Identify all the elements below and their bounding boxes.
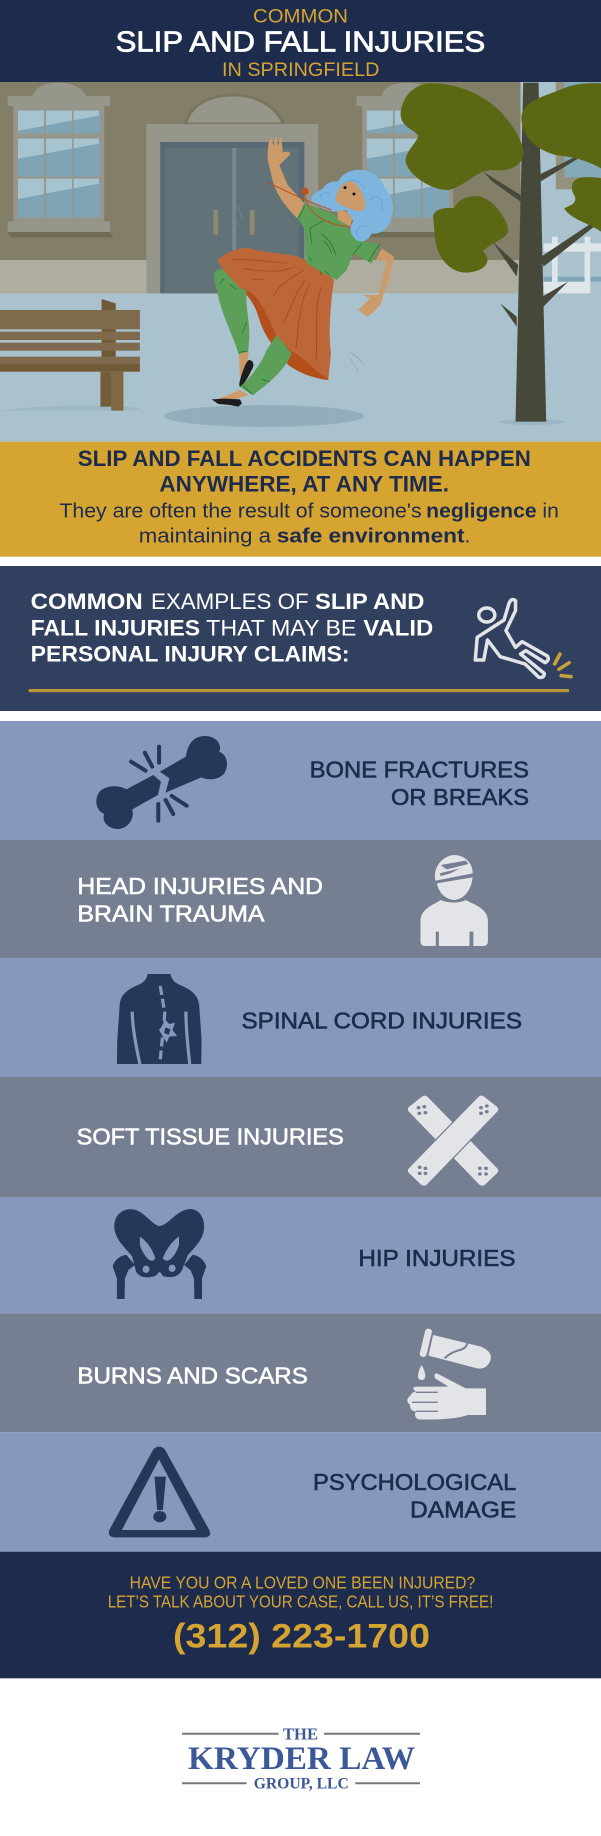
call to action footer	[0, 1552, 601, 1678]
icon: person falling	[475, 599, 571, 677]
law firm logo: THE	[283, 1724, 318, 1744]
intro heading: EXAMPLES OF	[151, 589, 309, 614]
building and street scene	[0, 82, 601, 442]
injury row: soft tissue	[0, 1077, 601, 1197]
woman shadow	[164, 405, 364, 427]
call to action text: HAVE YOU OR A LOVED ONE BEEN INJURED?	[130, 1573, 476, 1593]
bench	[0, 405, 140, 411]
law firm logo	[182, 1724, 420, 1793]
intro heading: SLIP AND	[315, 589, 424, 614]
intro heading: THAT MAY BE	[206, 616, 356, 641]
statement body	[59, 499, 559, 547]
label: PSYCHOLOGICAL	[313, 1469, 517, 1495]
label: SOFT TISSUE INJURIES	[77, 1123, 344, 1149]
statement body: They are often the result of someone's	[59, 499, 422, 522]
intro heading: PERSONAL INJURY CLAIMS:	[31, 642, 350, 667]
tree trunk and branches	[483, 83, 594, 422]
statement body: .	[465, 524, 470, 547]
intro heading: VALID	[363, 616, 433, 641]
injury row: psychological damage	[0, 1432, 601, 1552]
label	[77, 873, 323, 927]
gold statement band	[0, 442, 601, 557]
label: BRAIN TRAUMA	[77, 901, 265, 927]
phone number: (312) 223-1700	[173, 1618, 430, 1656]
woman falling	[212, 138, 394, 407]
title: SLIP AND FALL INJURIES	[116, 27, 485, 59]
gold statement band: ANYWHERE, AT ANY TIME.	[159, 472, 449, 497]
intro heading	[31, 589, 433, 667]
navy intro panel	[0, 566, 601, 711]
header banner	[0, 0, 601, 82]
door	[160, 142, 304, 293]
label	[310, 757, 529, 810]
door surround	[185, 95, 284, 124]
label: OR BREAKS	[391, 784, 529, 810]
icon: broken bone	[96, 736, 227, 829]
statement body: negligence	[426, 499, 537, 522]
call to action text	[108, 1573, 493, 1612]
law firm logo: GROUP, LLC	[254, 1776, 349, 1793]
label: HIP INJURIES	[358, 1245, 516, 1271]
label: BURNS AND SCARS	[77, 1363, 308, 1389]
tree shadow	[499, 419, 564, 425]
header location: IN SPRINGFIELD	[222, 59, 380, 81]
icon: spine and back	[117, 974, 202, 1064]
label: HEAD INJURIES AND	[77, 873, 323, 899]
statement body: in	[542, 499, 559, 522]
injury row: spinal cord	[0, 958, 601, 1077]
icon: chemical tube over hand	[407, 1332, 491, 1420]
label: BONE FRACTURES	[310, 757, 529, 783]
statement heading: SLIP AND FALL ACCIDENTS CAN HAPPEN	[78, 446, 531, 471]
icon: bandaged head	[420, 855, 488, 946]
statement body: maintaining a	[139, 524, 272, 547]
label: SPINAL CORD INJURIES	[242, 1007, 522, 1033]
left window	[8, 83, 113, 237]
injury row: burns	[0, 1313, 601, 1432]
intro heading: COMMON	[31, 589, 143, 614]
icon: pelvis	[113, 1209, 206, 1299]
injury row: head injuries	[0, 840, 601, 958]
label	[313, 1469, 517, 1523]
label: DAMAGE	[410, 1497, 516, 1523]
statement body: safe environment	[277, 524, 465, 547]
injury row: bone fractures	[0, 721, 601, 840]
divider rule	[29, 689, 569, 692]
icon: crossed bandages	[412, 1099, 494, 1182]
intro heading: FALL INJURIES	[31, 616, 200, 641]
injury row: hip	[0, 1197, 601, 1313]
call to action text: LET’S TALK ABOUT YOUR CASE, CALL US, IT’S FREE!	[108, 1592, 493, 1612]
law firm logo: KRYDER LAW	[188, 1741, 415, 1777]
fence	[544, 237, 601, 293]
tree foliage	[401, 83, 601, 273]
icon: warning triangle	[109, 1447, 210, 1537]
hero illustration: woman slipping outside building	[0, 82, 601, 442]
right window	[356, 83, 462, 237]
header kicker: COMMON	[253, 6, 348, 28]
